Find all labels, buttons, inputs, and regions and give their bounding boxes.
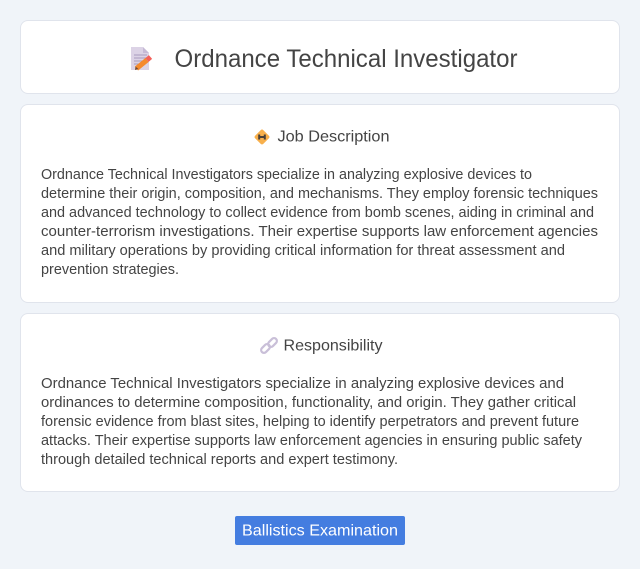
text: responsibility body: ordinances to determine composition, functionality, and origin. They gather critical xyxy=(41,395,576,411)
tag button: Ballistics Examination xyxy=(235,516,405,545)
text: job description body: and military operations by providing critical information for threat assessment and xyxy=(41,243,565,259)
panel: job description xyxy=(20,104,620,303)
text: job description body: prevention strategies. xyxy=(41,262,179,278)
text: job description body xyxy=(41,167,598,278)
heading: responsibility: Responsibility xyxy=(284,338,382,354)
icon: road sign xyxy=(254,130,270,144)
text: responsibility body: attacks. Their expertise supports law enforcement agencies in ensuring public safety xyxy=(41,433,583,449)
panel: responsibility xyxy=(20,313,620,492)
icon: document with pencil xyxy=(131,47,152,70)
tag button: Ballistics Examination: Ballistics Examination xyxy=(242,522,398,540)
text: job description body: determine their origin, composition, and mechanisms. They employ forensic techniques xyxy=(41,186,598,202)
icon: chain link xyxy=(260,337,278,354)
text: job description body: counter-terrorism investigations. Their expertise supports law enforcement agencies xyxy=(41,224,598,240)
text: responsibility body: through detailed technical reports and expert testimony. xyxy=(41,452,398,468)
title text: Ordnance Technical Investigator xyxy=(174,45,518,73)
text: responsibility body xyxy=(41,376,583,468)
text: responsibility body: Ordnance Technical Investigators specialize in analyzing explosive devices and xyxy=(41,376,564,392)
panel: title xyxy=(20,20,620,94)
heading: job description: Job Description xyxy=(278,128,390,146)
text: job description body: and advanced technology to collect evidence from bomb scenes, aiding in criminal and xyxy=(41,205,594,221)
text: job description body: Ordnance Technical Investigators specialize in analyzing explosive devices to xyxy=(41,167,532,183)
text: responsibility body: forensic evidence from blast sites, helping to identify perpetrators and prevent future xyxy=(41,414,579,430)
